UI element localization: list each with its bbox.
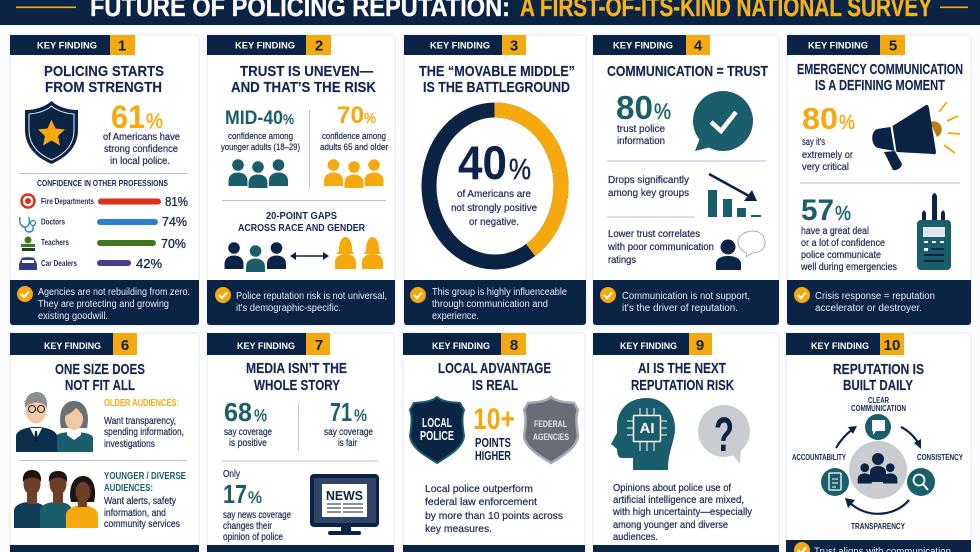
icon: news monitor bbox=[310, 474, 379, 535]
panel: key finding 2: KEY FINDING bbox=[235, 40, 295, 52]
bar chart: confidence in other professions: 70% bbox=[161, 236, 186, 251]
stat: younger adults: confidence among bbox=[228, 131, 293, 141]
callout: Crisis response = reputation bbox=[815, 291, 935, 302]
stat: 57 percent: % bbox=[835, 203, 851, 225]
text: older audiences bbox=[104, 398, 184, 450]
heading bbox=[631, 360, 734, 394]
text: younger diverse audiences: YOUNGER / DIVERSE bbox=[104, 471, 186, 482]
panel: key finding 9 bbox=[593, 333, 779, 552]
icon: megaphone bbox=[872, 102, 960, 170]
donut chart: 40 percent: or negative. bbox=[469, 217, 519, 228]
text: AI opinions: Opinions about police use of bbox=[613, 483, 731, 494]
donut chart: 40 percent: of Americans are bbox=[457, 189, 531, 200]
text: local police outperform: Local police outperform bbox=[425, 483, 533, 495]
text: local police outperform: federal law enforcement bbox=[425, 496, 537, 508]
stat: 68 percent positive: 68 bbox=[224, 397, 252, 427]
callout: They are protecting and growing bbox=[38, 299, 169, 310]
heading: POLICING STARTS bbox=[44, 63, 164, 80]
heading bbox=[833, 361, 924, 394]
panel: key finding 7 bbox=[207, 333, 394, 552]
panel: key finding 1 bbox=[10, 35, 199, 325]
stat: 71 percent fair bbox=[324, 397, 373, 449]
stat: 80 percent critical: extremely or bbox=[802, 150, 854, 161]
text: lower trust correlates: ratings bbox=[608, 255, 636, 266]
heading bbox=[246, 360, 347, 394]
title bbox=[90, 0, 932, 22]
stat: 61 percent: % bbox=[146, 110, 163, 133]
icon: local police badge: POLICE bbox=[420, 429, 454, 443]
bar chart: confidence in other professions: Car Dealers bbox=[41, 258, 77, 268]
panel: key finding 5: 5 bbox=[889, 38, 897, 54]
text: AI opinions: with high uncertainty—especially bbox=[612, 507, 752, 518]
text: lower trust correlates: with poor communication bbox=[607, 242, 714, 253]
heading: REPUTATION RISK bbox=[631, 377, 734, 394]
text: AI opinions: among younger and diverse bbox=[613, 520, 728, 531]
callout: existing goodwill. bbox=[38, 311, 108, 322]
heading: TRUST IS UNEVEN— bbox=[240, 63, 373, 80]
panel: key finding 6: 6 bbox=[121, 337, 129, 354]
bar chart: confidence in other professions: 42% bbox=[136, 256, 162, 271]
diagram: reputation cycle bbox=[792, 396, 964, 531]
panel: key finding 10: 10 bbox=[884, 337, 900, 354]
stat: 57 percent: or a lot of confidence bbox=[801, 238, 885, 249]
text: AI opinions: artificial intelligence are mixed, bbox=[613, 495, 744, 506]
diagram: reputation cycle: TRANSPARENCY bbox=[851, 522, 906, 531]
stat: older adults bbox=[320, 102, 388, 152]
stat: 71 percent fair: say coverage bbox=[324, 427, 373, 438]
stat: 17 percent: changes their bbox=[223, 521, 273, 532]
stat: 10+ points higher: 10+ bbox=[473, 403, 515, 436]
stat: older adults: adults 65 and older bbox=[320, 142, 388, 152]
diagram: reputation cycle: CLEAR bbox=[868, 396, 889, 405]
icon: police shield with star bbox=[25, 101, 78, 164]
bar chart: confidence in other professions: 81% bbox=[165, 194, 188, 209]
heading bbox=[55, 361, 145, 394]
icon: AI head bbox=[611, 398, 675, 470]
text: younger diverse audiences: community services bbox=[104, 519, 180, 530]
text: local police outperform: key measures. bbox=[425, 523, 492, 535]
icon: person with empty speech bubble bbox=[716, 231, 765, 270]
panel: key finding 3 bbox=[404, 35, 586, 325]
icon: federal agencies badge: AGENCIES bbox=[533, 432, 569, 443]
stat: 17 percent: opinion of police bbox=[223, 532, 283, 543]
stat: 61 percent: strong confidence bbox=[104, 144, 178, 155]
stat: 61 percent bbox=[103, 99, 180, 167]
heading: THE “MOVABLE MIDDLE” bbox=[419, 63, 575, 80]
text: AI opinions bbox=[612, 483, 752, 543]
panel: key finding 2: 2 bbox=[315, 38, 323, 54]
subheading: 20-POINT GAPS bbox=[266, 211, 337, 222]
subheading: ACROSS RACE AND GENDER bbox=[238, 223, 366, 234]
panel: key finding 4 bbox=[593, 35, 779, 325]
text: younger diverse audiences: Want alerts, safety bbox=[104, 496, 176, 507]
panel: key finding 10 bbox=[786, 333, 971, 552]
panel: key finding 9: KEY FINDING bbox=[620, 341, 677, 352]
stat: 57 percent bbox=[800, 194, 897, 273]
stat: 80 percent critical: very critical bbox=[802, 162, 849, 173]
stat: older adults: confidence among bbox=[322, 131, 386, 141]
text: younger diverse audiences bbox=[104, 471, 186, 530]
donut chart: 40 percent: not strongly positive bbox=[451, 203, 537, 214]
stat: 61 percent: in local police. bbox=[110, 156, 170, 167]
stat: 68 percent positive bbox=[224, 397, 272, 449]
callout bbox=[207, 280, 395, 325]
donut chart: 40 percent: % bbox=[509, 154, 531, 186]
text: younger diverse audiences: information, and bbox=[104, 508, 166, 519]
bar chart: confidence in other professions bbox=[19, 178, 188, 271]
callout bbox=[787, 280, 971, 325]
panel: key finding 8: 8 bbox=[510, 337, 518, 354]
bar chart: confidence in other professions: Fire Departments bbox=[41, 196, 94, 206]
text: drops significantly: Drops significantly bbox=[608, 175, 689, 186]
panel: key finding 8 bbox=[403, 333, 585, 552]
heading: WHOLE STORY bbox=[254, 377, 340, 394]
stat: 80 percent trust: % bbox=[654, 99, 671, 124]
stat: older adults: 70 bbox=[337, 102, 364, 129]
panel: key finding 5: KEY FINDING bbox=[808, 40, 868, 52]
icon: teal people bbox=[228, 159, 288, 188]
callout: accelerator or destroyer. bbox=[815, 303, 922, 314]
stat: 80 percent critical bbox=[802, 101, 855, 173]
stat: 68 percent positive: is positive bbox=[229, 438, 267, 449]
panel: key finding 1: 1 bbox=[118, 38, 126, 54]
illustration: younger diverse group bbox=[14, 470, 98, 528]
panel: key finding 4: 4 bbox=[694, 38, 703, 54]
callout: experience. bbox=[432, 311, 479, 322]
icon: police radio bbox=[917, 193, 951, 270]
panel: key finding 4: KEY FINDING bbox=[613, 40, 673, 52]
heading: ONE SIZE DOES bbox=[55, 361, 145, 378]
callout bbox=[593, 280, 779, 325]
stat: younger adults: younger adults (18–29) bbox=[221, 142, 300, 152]
callout: through communication and bbox=[432, 299, 548, 310]
heading: REPUTATION IS bbox=[833, 361, 924, 378]
donut chart: 40 percent: 40 bbox=[458, 136, 507, 189]
text: local police outperform bbox=[425, 483, 563, 535]
header banner bbox=[0, 0, 980, 25]
heading bbox=[797, 61, 963, 94]
text: drops significantly bbox=[608, 175, 689, 199]
heading: MEDIA ISN’T THE bbox=[246, 360, 347, 377]
stat: 61 percent: of Americans have bbox=[103, 132, 180, 143]
stat: 17 percent: % bbox=[248, 488, 262, 507]
subheading bbox=[238, 211, 366, 234]
donut chart: 40 percent bbox=[429, 110, 561, 262]
callout: Communication is not support, bbox=[622, 291, 750, 302]
icon: federal agencies badge: FEDERAL bbox=[534, 419, 567, 430]
callout: This group is highly influenceable bbox=[432, 287, 567, 298]
panel: key finding 5 bbox=[787, 35, 971, 325]
stat: older adults: % bbox=[364, 110, 376, 127]
heading: AND THAT’S THE RISK bbox=[231, 79, 376, 96]
stat: 57 percent: have a great deal bbox=[801, 226, 869, 237]
panel: key finding 3: 3 bbox=[510, 38, 518, 54]
heading: NOT FIT ALL bbox=[65, 377, 135, 394]
panel: key finding 8: KEY FINDING bbox=[432, 341, 490, 352]
heading: IS THE BATTLEGROUND bbox=[423, 79, 570, 96]
text: AI opinions: audiences. bbox=[613, 532, 658, 543]
icon: gold people bbox=[324, 159, 384, 188]
heading: AI IS THE NEXT bbox=[638, 360, 726, 377]
stat: 10+ points higher: POINTS bbox=[475, 436, 511, 450]
heading: BUILT DAILY bbox=[843, 377, 913, 394]
stat: younger adults bbox=[221, 107, 300, 152]
panel: key finding 9: 9 bbox=[696, 337, 704, 354]
stat: 68 percent positive: say coverage bbox=[224, 427, 272, 438]
stat: 17 percent bbox=[223, 469, 291, 543]
illustration: older couple bbox=[16, 392, 93, 452]
panel: key finding 2 bbox=[207, 35, 395, 325]
stat: 80 percent trust: trust police bbox=[617, 124, 665, 135]
stat: 71 percent fair: is fair bbox=[338, 438, 358, 449]
heading bbox=[438, 360, 551, 394]
icon: news monitor: NEWS bbox=[326, 489, 363, 503]
stat: 57 percent: 57 bbox=[801, 194, 834, 227]
text: local police outperform: by more than 10 points across bbox=[425, 510, 563, 522]
text: older audiences: OLDER AUDIENCES: bbox=[104, 398, 179, 409]
stat: 80 percent trust bbox=[616, 89, 671, 147]
panel: key finding 3: KEY FINDING bbox=[430, 40, 490, 52]
panel: key finding 7: KEY FINDING bbox=[237, 341, 295, 352]
bar chart: confidence in other professions: Doctors bbox=[41, 216, 65, 226]
icon: people gap comparison bbox=[224, 237, 383, 272]
callout: it's the driver of reputation. bbox=[622, 303, 738, 314]
heading bbox=[419, 63, 575, 96]
callout bbox=[10, 280, 199, 325]
icon: local police badge: LOCAL bbox=[422, 416, 452, 430]
icon: falling bars with arrow bbox=[708, 174, 761, 217]
text: drops significantly: among key groups bbox=[608, 188, 689, 199]
panel: key finding 10: KEY FINDING bbox=[811, 341, 869, 352]
heading: LOCAL ADVANTAGE bbox=[438, 360, 551, 377]
text: lower trust correlates bbox=[607, 229, 714, 266]
stat: 10+ points higher bbox=[473, 403, 515, 463]
stat: 17 percent: 17 bbox=[223, 479, 247, 509]
icon: AI head: AI bbox=[640, 420, 654, 437]
stat: 80 percent critical: 80 bbox=[802, 101, 838, 136]
stat: 17 percent: say news coverage bbox=[223, 510, 291, 521]
stat: 68 percent positive: % bbox=[254, 406, 267, 425]
heading: COMMUNICATION = TRUST bbox=[607, 63, 768, 80]
panel: key finding 7: 7 bbox=[315, 337, 323, 354]
bar chart: confidence in other professions: 74% bbox=[162, 214, 187, 229]
stat: 71 percent fair: % bbox=[354, 406, 367, 425]
callout: Agencies are not rebuilding from zero. bbox=[38, 287, 190, 298]
stat: 17 percent: Only bbox=[223, 469, 240, 480]
bar chart: confidence in other professions: Teachers bbox=[41, 237, 69, 247]
stat: 80 percent trust: information bbox=[617, 136, 665, 147]
text: lower trust correlates: Lower trust correlates bbox=[608, 229, 700, 240]
bar chart: confidence in other professions: CONFIDENCE IN OTHER PROFESSIONS bbox=[37, 178, 168, 188]
stat: 71 percent fair: 71 bbox=[330, 397, 352, 427]
diagram: reputation cycle: ACCOUNTABILITY bbox=[792, 453, 847, 462]
panel: key finding 1: KEY FINDING bbox=[37, 40, 97, 52]
stat: 57 percent: police communicate bbox=[801, 250, 881, 261]
stat: younger adults: % bbox=[283, 111, 294, 127]
stat: 80 percent trust: 80 bbox=[616, 89, 653, 126]
stat: 10+ points higher: HIGHER bbox=[475, 449, 511, 463]
callout: Police reputation risk is not universal, bbox=[236, 291, 387, 302]
icon: question bubble bbox=[698, 405, 750, 464]
callout bbox=[786, 540, 971, 552]
text: older audiences: spending information, bbox=[104, 427, 184, 438]
icon: question bubble: ? bbox=[714, 409, 734, 462]
text: younger diverse audiences: AUDIENCES: bbox=[104, 483, 153, 494]
text: older audiences: Want transparency, bbox=[104, 416, 176, 427]
heading bbox=[231, 63, 376, 96]
icon: local police badge bbox=[410, 397, 464, 463]
icon: speech bubble with check bbox=[693, 91, 753, 151]
icon: federal agencies badge bbox=[524, 397, 578, 463]
callout bbox=[404, 280, 586, 325]
heading: IS REAL bbox=[472, 377, 518, 394]
stat: 61 percent: 61 bbox=[111, 99, 145, 135]
text: older audiences: investigations bbox=[104, 439, 155, 450]
heading bbox=[44, 63, 164, 96]
heading: FROM STRENGTH bbox=[45, 79, 162, 96]
diagram: reputation cycle: COMMUNICATION bbox=[851, 404, 906, 413]
stat: younger adults: MID-40 bbox=[225, 107, 283, 129]
panel: key finding 6: KEY FINDING bbox=[44, 341, 101, 352]
panel: key finding 6 bbox=[10, 333, 199, 552]
callout: it's demographic-specific. bbox=[236, 303, 341, 314]
stat: 80 percent critical: say it's bbox=[802, 137, 825, 148]
stat: 80 percent critical: % bbox=[839, 112, 855, 134]
stat: 57 percent: well during emergencies bbox=[800, 262, 897, 273]
diagram: reputation cycle: CONSISTENCY bbox=[917, 453, 964, 462]
